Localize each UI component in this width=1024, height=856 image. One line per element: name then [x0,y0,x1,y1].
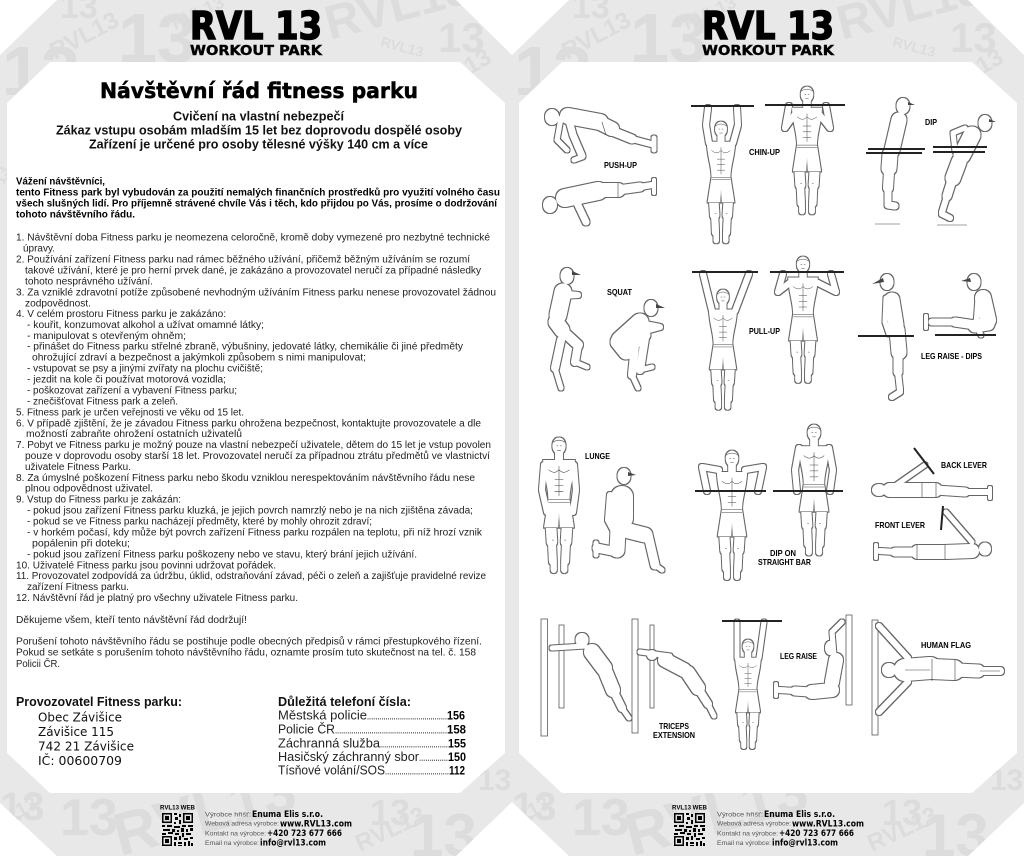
exercise: human flag [872,620,1000,735]
label: PULL-UP [749,326,780,336]
subheading: safety notices: Zařízení je určené pro osoby tělesné výšky 140 cm a více [89,138,428,152]
text block: violations notice: Policii ČR. [16,659,60,670]
text block: numbered rules: - znečišťovat Fitness park a zeleň. [27,396,178,407]
text block: important phone numbers: 156 [447,708,465,722]
manufacturer lines: Enuma Elis s.r.o. [252,810,323,820]
text block: numbered rules: - vstupovat se psy a jinými zvířaty na plochu cvičiště; [27,364,263,374]
text block: greeting: Vážení návštěvníci, [16,176,105,188]
watermark: right page RVL13 pattern [512,0,1023,856]
manufacturer lines: Webová adresa výrobce: [717,822,791,828]
text block: numbered rules: možností zabraňte ohrožení ostatních uživatelů [26,429,242,440]
label: LEG RAISE - DIPS [921,351,982,361]
watermark: right page RVL13 pattern: RVL13 [891,33,937,60]
text block: greeting: tohoto návštěvního řádu. [16,210,135,220]
manufacturer lines: www.RVL13.com [280,820,352,830]
text block: greeting: všech slušných lidí. Pro příjemně strávené chvíle Vás i těch, kdo přijdou po Vás, prosíme o dodržování [16,198,497,210]
text block: numbered rules: takové užívání, které je pro herní prvek dané, je zakázáno a provozovatel neručí za případné následky [25,265,481,276]
subheading: safety notices: Zákaz vstupu osobám mladším 15 let bez doprovodu dospělé osoby [56,124,462,138]
qr code label: RVL13 WEB [160,804,195,812]
label: CHIN-UP [749,147,780,157]
text block: numbered rules: - poškozovat zařízení a vybavení Fitness parku; [27,385,237,396]
watermark: right page RVL13 pattern: 13 [514,32,592,110]
watermark: right page RVL13 pattern: 13 [990,764,1023,797]
background: right grey octagon [512,0,1024,856]
watermark: left page RVL13 pattern: 13 [438,14,485,61]
exercise: triceps extension [541,619,714,740]
manufacturer lines: Email na výrobce: [205,841,259,847]
manufacturer lines: Kontakt na výrobce: [717,832,778,838]
subheading: safety notices: Cvičení na vlastní nebezpečí [173,110,345,124]
footer: manufacturer contact [160,804,352,848]
watermark: left page RVL13 pattern: RVL13 [45,7,123,65]
text block: important phone numbers: 158 [447,722,466,736]
watermark: right page RVL13 pattern: 13 [882,792,922,833]
manufacturer lines: Kontakt na výrobce: [205,832,266,838]
text block: numbered rules: 10. Uživatelé Fitness parku jsou povinni udržovat pořádek. [16,560,276,571]
panel: white content card [7,62,505,793]
text block: important phone numbers: 112 [449,764,465,778]
label: DIP ON [770,548,796,558]
watermark: right page RVL13 pattern: 13 [630,0,708,77]
watermark: left page RVL13 pattern: 13 [460,43,496,80]
title: Návštěvní řád fitness parku [100,79,418,103]
text block: greeting [16,176,500,220]
text block: numbered rules: pouze v doprovodu osoby starší 18 let. Provozovatel neručí za případnou ztrátu předmětů ve vlastnictví [25,451,490,462]
label: TRICEPS [659,721,689,731]
manufacturer lines: www.RVL13.com [792,820,864,830]
text block: numbered rules: 12. Návštěvní řád je platný pro všechny uživatele Fitness parku. [16,593,298,604]
manufacturer lines [205,810,352,848]
text block: numbered rules: zodpovědnost. [25,298,91,309]
watermark: right page RVL13 pattern: 13 [572,789,630,847]
watermark: left page RVL13 pattern: 13 [2,32,80,110]
qr code [674,813,705,846]
manufacturer lines: Výrobce hřišť: [205,812,251,818]
label: HUMAN FLAG [921,640,971,650]
watermark: left page RVL13 pattern: RVL13 [379,33,425,60]
watermark: left page RVL13 pattern: 13 [370,792,410,833]
footer: manufacturer contact [672,804,864,848]
panel: left page [0,0,512,856]
text block: operator address: Provozovatel Fitness parku: [16,695,182,709]
exercise: front lever [875,506,991,559]
label: LUNGE [585,451,610,461]
manufacturer lines: Webová adresa výrobce: [205,822,279,828]
text block: important phone numbers: Důležitá telefoní čísla: [278,695,411,709]
text block: numbered rules: plnou odpovědnost uživatel. [25,484,153,495]
label [758,548,811,567]
label: BACK LEVER [941,460,987,470]
text block: numbered rules: - v horkém počasí, kdy může být povrch zařízení Fitness parku rozpálen na teplotu, při níž hrozí vznik [27,528,482,539]
exercise: back lever [872,448,990,498]
text block: important phone numbers: Tísňové volání/SOS [278,764,385,778]
exercise: push-up [543,109,654,222]
exercise: dip on straight bar [695,425,843,577]
label: EXTENSION [653,730,695,740]
watermark: left page RVL13 pattern: 13 [478,764,511,797]
watermark: right page RVL13 pattern: 13 [524,792,554,822]
text block: numbered rules: ohrožující zdraví a bezpečnost a jakýmkoli způsobem s nimi manipulovat; [32,353,366,364]
panel: white exercise card [519,62,1017,793]
watermark: left page RVL13 pattern: 13 [0,785,44,829]
label: DIP [925,117,937,127]
manufacturer lines [717,810,864,848]
watermark: right page RVL13 pattern: RVL13 [557,7,635,65]
text block: numbered rules: 3. Za vzniklé zdravotní potíže způsobené nevhodným užíváním Fitness parku nenese provozovatel žádnou [16,287,496,298]
subheading: safety notices [56,110,462,152]
text block: numbered rules: - kouřit, konzumovat alkohol a užívat omamné látky; [27,320,264,331]
background: left grey octagon [0,0,512,856]
text block: important phone numbers: .............. [419,750,448,764]
exercise: dip [866,98,996,225]
text block: operator address: 742 21 Závišice [38,738,134,754]
qr code label: RVL13 WEB [672,804,707,812]
text block: important phone numbers: Policie ČR [278,722,335,736]
text block: numbered rules: úpravy. [23,244,55,255]
text block: operator address [16,695,182,768]
text block: numbered rules: - manipulovat s otevřeným ohněm; [27,331,186,342]
logo: RVL 13 Workout Park: WORKOUT PARK [702,44,835,59]
text block: important phone numbers: ............................... [385,764,449,778]
text block: numbered rules: 9. Vstup do Fitness parku je zakázán: [16,495,181,506]
text block: important phone numbers: Městská policie [278,708,367,722]
label: SQUAT [607,287,633,297]
manufacturer lines: Enuma Elis s.r.o. [764,810,835,820]
text block: important phone numbers: Hasičský záchranný sbor [278,750,419,764]
manufacturer lines: info@rvl13.com [260,838,326,848]
text block: violations notice [16,637,482,670]
label: STRAIGHT BAR [758,557,811,567]
logo: RVL 13 Workout Park: WORKOUT PARK [190,44,323,59]
exercise: leg raise - dips [858,274,996,397]
panel: right page [512,0,1024,856]
text block: numbered rules: - jezdit na kole či používat motorová vozidla; [27,374,226,385]
text block: numbered rules: 1. Návštěvní doba Fitness parku je neomezena celoročně, kromě doby vymezené pro nezbytné technické [16,233,491,244]
manufacturer lines: Email na výrobce: [717,841,771,847]
qr code [162,813,193,846]
text block: operator address: Závišice 115 [38,724,114,739]
exercise: chin-up [691,87,845,241]
text block: numbered rules: popálenin při doteku; [32,539,130,550]
watermark: right page RVL13 pattern: 13 [950,14,997,61]
text block: important phone numbers [278,695,466,778]
exercise: leg raise [722,615,852,746]
text block: important phone numbers: ................................. [380,736,448,750]
text block: numbered rules: 7. Pobyt ve Fitness parku je možný pouze na vlastní nebezpečí uživatele, dětem do 15 let je vstup povolen [16,440,491,451]
text block: numbered rules: 4. V celém prostoru Fitness parku je zakázáno: [16,309,226,320]
text block: numbered rules: - pokud jsou zařízení Fitness parku poškozeny nebo ve stavu, který brání jejich užívání. [27,549,417,560]
text block: numbered rules: 5. Fitness park je určen veřejnosti ve věku od 15 let. [16,407,244,418]
text block: important phone numbers: 155 [448,736,466,750]
text block: numbered rules: 8. Za úmyslné poškození Fitness parku nebo škodu vzniklou nerespektováním návštěvního řádu nese [16,473,476,484]
label: PUSH-UP [604,160,637,170]
manufacturer lines: +420 723 677 666 [779,829,854,839]
watermark: left page RVL13 pattern [0,0,511,856]
text block: violations notice: Porušení tohoto návštěvního řádu se postihuje podle obecných předpisů v rámci přestupkového řízení. [16,637,482,648]
logo: RVL 13 Workout Park: RVL 13 [702,4,834,48]
text block: violations notice: Pokud se setkáte s porušením tohoto návštěvního řádu, oznamte prosím tuto skutečnost na tel. č. 158 [16,648,477,659]
exercise: lunge [542,438,662,570]
manufacturer lines: +420 723 677 666 [267,829,342,839]
text block: important phone numbers: 150 [448,750,466,764]
label: FRONT LEVER [875,520,925,530]
manufacturer lines: Výrobce hřišť: [717,812,763,818]
watermark: left page RVL13 pattern: 13 [118,0,196,77]
text block: important phone numbers: ....................................................... [335,722,447,736]
text block: thanks: Děkujeme všem, kteří tento návštěvní řád dodržují! [16,615,247,626]
text block: operator address: Obec Závišice [38,710,122,724]
text block: operator address: IČ: 00600709 [38,753,122,768]
text block: numbered rules: - pokud jsou zařízení Fitness parku kluzká, je jejich povrch namrzlý nebo je na nich zjištěna závada; [27,506,473,517]
text block: numbered rules: 2. Používání zařízení Fitness parku nad rámec běžného užívání, přičemž běžným užíváním se rozumí [16,254,470,266]
label: LEG RAISE [780,651,817,661]
text block: numbered rules: zařízení Fitness parku. [27,582,129,593]
exercise: pull-up [692,257,844,407]
watermark: left page RVL13 pattern: 13 [60,789,118,847]
text block: important phone numbers: Záchranná služba [278,736,380,750]
watermark: right page RVL13 pattern: 13 [512,785,556,829]
text block: numbered rules: uživatele Fitness Parku. [25,462,131,473]
watermark: left page RVL13 pattern: 13 [12,792,42,822]
label [653,721,695,740]
text block: numbered rules: 6. V případě zjištění, že je závadou Fitness parku ohrožena bezpečnost, kontaktujte provozovatele a dle [16,418,482,429]
text block: numbered rules [16,233,496,604]
watermark: left page RVL13 pattern: RVL13 [351,802,430,856]
text block: numbered rules: 11. Provozovatel zodpovídá za údržbu, úklid, odstraňování závad, péči o zeleň a zajišťuje pravidelné revize [16,571,487,582]
watermark: right page RVL13 pattern: 13 [972,43,1008,80]
text block: numbered rules: - přinášet do Fitness parku střelné zbraně, výbušniny, jedovaté látky, chemikálie či jiné předměty [27,342,463,353]
watermark: right page RVL13 pattern: RVL13 [863,802,942,856]
text block: numbered rules: - pokud se ve Fitness parku nacházejí předměty, které by mohly ohrozit zdraví; [27,517,372,528]
text block: numbered rules: tohoto nesprávného užívání. [25,276,153,287]
manufacturer lines: info@rvl13.com [772,838,838,848]
text block: important phone numbers: ....................................... [367,708,447,722]
logo: RVL 13 Workout Park: RVL 13 [190,4,322,48]
text block: greeting: tento Fitness park byl vybudován za použití nemalých finančních prostředků pro využití volného času [16,188,500,198]
exercise: squat [555,268,665,388]
